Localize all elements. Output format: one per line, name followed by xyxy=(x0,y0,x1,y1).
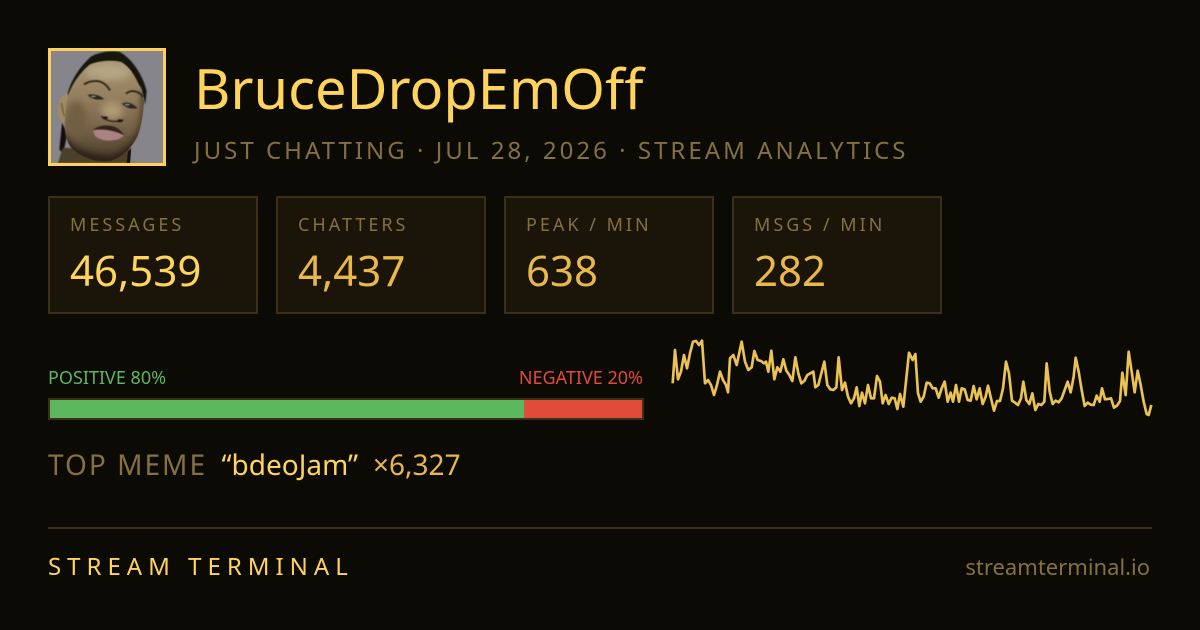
sparkline chart xyxy=(671,339,1153,416)
url: streamterminal.io xyxy=(965,552,1150,582)
stat card: messages: 46,539 xyxy=(70,242,201,299)
stat card: chatters: CHATTERS xyxy=(298,213,408,237)
stat card: peak per minute xyxy=(504,196,714,314)
ear xyxy=(57,94,68,122)
face xyxy=(65,61,144,161)
stat card: peak per minute: PEAK / MIN xyxy=(526,213,652,237)
brows xyxy=(84,81,143,97)
lips xyxy=(93,129,124,140)
positive label: POSITIVE 80% xyxy=(48,366,166,390)
top meme label: TOP MEME xyxy=(48,446,207,484)
negative label: NEGATIVE 20% xyxy=(519,366,643,390)
top meme name: “bdeoJam” xyxy=(222,446,358,484)
hair xyxy=(67,51,147,105)
stat card: messages per minute: 282 xyxy=(754,242,826,299)
top meme count: ×6,327 xyxy=(373,446,461,484)
avatar photo xyxy=(48,48,166,166)
subtitle: JUST CHATTING · JUL 28, 2026 · STREAM ANALYTICS xyxy=(194,134,909,167)
title: BruceDropEmOff xyxy=(194,50,644,126)
eyes xyxy=(88,94,104,100)
stat card: chatters: 4,437 xyxy=(298,242,405,299)
stat card: messages xyxy=(48,196,258,314)
braid xyxy=(59,123,67,153)
neck xyxy=(58,148,131,163)
stat card: messages: MESSAGES xyxy=(70,213,184,237)
sentiment bar xyxy=(48,398,644,420)
stat card: messages per minute xyxy=(732,196,942,314)
stat card: chatters xyxy=(276,196,486,314)
nose xyxy=(101,102,123,119)
stat card: messages per minute: MSGS / MIN xyxy=(754,213,885,237)
stat card: peak per minute: 638 xyxy=(526,242,598,299)
brand: STREAM TERMINAL xyxy=(48,550,354,583)
